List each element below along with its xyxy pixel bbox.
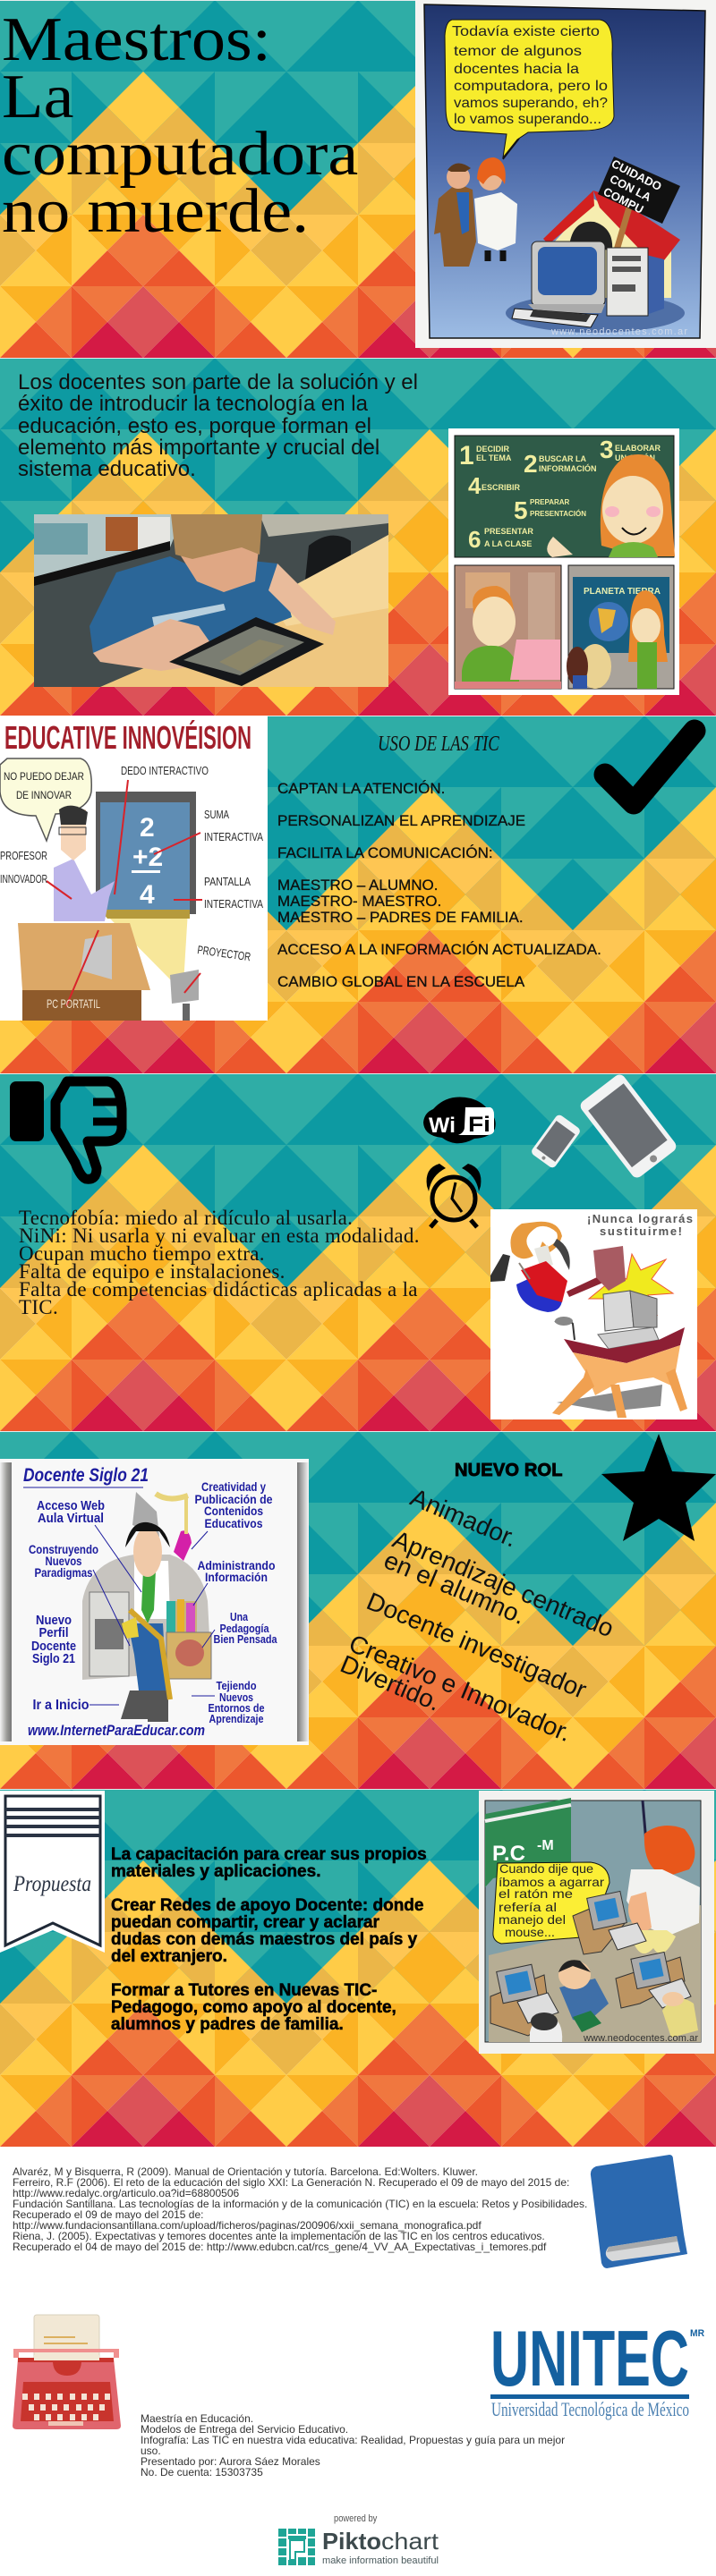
illustration: educative innoveision: +2 [132, 843, 163, 872]
text block: nuevo rol list: Aprendizaje centrado [389, 1525, 618, 1642]
text: datos de la maestria: uso. [141, 2445, 161, 2457]
logo: piktochart [278, 2528, 439, 2566]
illustration: cartoon manejo del mouse: mouse... [505, 1925, 555, 1939]
illustration: cartoon cuidado con la compu: www.neodocentes.com.ar [550, 326, 687, 337]
icon: typewriter [13, 2315, 121, 2429]
list: uso de las tic: FACILITA LA COMUNICACIÓN: [277, 844, 493, 861]
illustration: educative innoveision: INNOVADOR [0, 872, 47, 886]
illustration: docente siglo 21: Una [230, 1610, 249, 1623]
illustration: educative innoveision: 2 [140, 813, 155, 843]
references text: Ferreiro, R.F (2006). El reto de la educación del siglo XXI: La Generación N. Recuperado el 09 de mayo del 2015 de: [13, 2176, 569, 2189]
text block: nuevo rol list: Divertido. [337, 1650, 445, 1716]
illustration: educative innoveision: DEDO INTERACTIVO [121, 764, 209, 777]
text block: desventajas: Falta de equipo e instalaciones. [19, 1260, 286, 1283]
references text: Recuperado el 04 de mayo del 2015 de: http://www.edubcn.cat/rcs_gene/4_VV_AA_Expectativas_i_temores.pdf [13, 2241, 546, 2253]
icon: wifi [423, 1097, 496, 1143]
list: uso de las tic: PERSONALIZAN EL APRENDIZAJE [277, 812, 525, 829]
text block: desventajas: Ocupan mucho tiempo extra. [19, 1242, 265, 1265]
icon: check mark [594, 719, 705, 814]
illustration: docente siglo 21: Bien Pensada [213, 1632, 277, 1646]
illustration: pasos comic: PREPARAR [530, 498, 570, 506]
list: uso de las tic: ACCESO A LA INFORMACIÓN ACTUALIZADA. [277, 941, 601, 958]
logo: piktochart: Pikto [322, 2528, 381, 2555]
logo: piktochart: chart [381, 2528, 439, 2555]
photo: boy with tablet [34, 514, 388, 687]
icon: thumbs down [10, 1077, 127, 1184]
hammer [567, 1270, 616, 1297]
text: datos de la maestria: Modelos de Entrega del Servicio Educativo. [141, 2423, 348, 2436]
paragraph: los docentes: Los docentes son parte de la solución y el [18, 370, 418, 394]
illustration: cartoon manejo del mouse: www.neodocentes.com.ar [583, 2033, 698, 2044]
illustration: docente siglo 21: Paradigmas [34, 1565, 93, 1580]
illustration: nunca lograras sustituirme: sustituirme! [600, 1224, 682, 1238]
computer [646, 255, 664, 315]
text block: nuevo rol list: Animador. [406, 1483, 521, 1553]
illustration: pasos comic: 4 [468, 472, 482, 499]
text: datos de la maestria: Presentado por: Aurora Sáez Morales [141, 2455, 320, 2468]
illustration: docente siglo 21: Docente [31, 1639, 76, 1654]
man [434, 183, 476, 267]
illustration: docente siglo 21: www.InternetParaEducar.com [28, 1722, 205, 1739]
illustration: docente siglo 21: Construyendo [29, 1542, 98, 1556]
text block: nuevo rol list: Creativo e Innovador. [345, 1629, 575, 1747]
illustration: cartoon manejo del mouse: -M [537, 1838, 554, 1853]
dog house [553, 199, 671, 298]
title: La [2, 63, 73, 131]
illustration: cartoon manejo del mouse: manejo del [499, 1912, 566, 1927]
burst [589, 1254, 673, 1322]
illustration: pasos comic: 2 [524, 450, 538, 478]
text: datos de la maestria: No. De cuenta: 15303735 [141, 2466, 263, 2479]
logo: unitec: MR [690, 2328, 704, 2339]
text block: desventajas: NiNi: Ni usarla y ni evaluar en esta modalidad. [19, 1224, 420, 1247]
teacher [601, 454, 675, 556]
text block: propuesta: del extranjero. [111, 1947, 227, 1966]
illustration: docente siglo 21: Educativos [204, 1516, 263, 1530]
title: no muerde. [2, 177, 309, 246]
references text: http://www.redalyc.org/articulo.oa?id=68800506 [13, 2187, 239, 2199]
illustration: docente siglo 21: Contenidos [204, 1504, 263, 1518]
title: computadora [2, 120, 358, 189]
illustration: docente siglo 21: Creatividad y [201, 1479, 266, 1494]
paragraph: los docentes [18, 370, 418, 481]
illustration: cartoon manejo del mouse: el ratón me [499, 1886, 573, 1901]
icon: phones [532, 1075, 677, 1177]
references text [13, 2165, 587, 2253]
panel left [455, 565, 561, 689]
ribbon: propuesta [0, 1791, 105, 1953]
illustration: cartoon cuidado con la compu: Todavía existe cierto [452, 24, 600, 39]
text block: desventajas [19, 1207, 420, 1318]
text block: propuesta: Crear Redes de apoyo Docente: donde [111, 1896, 423, 1915]
list: uso de las tic: MAESTRO- MAESTRO. [277, 893, 441, 910]
paragraph: los docentes: sistema educativo. [18, 457, 196, 481]
illustration: docente siglo 21: Aprendizaje [209, 1712, 263, 1725]
text block: nuevo rol list: Docente investigador [362, 1588, 591, 1704]
illustration: pasos comic: UN GUIÓN [615, 453, 655, 462]
illustration: docente siglo 21: Información [205, 1570, 268, 1584]
references text: Recuperado el 09 de mayo del 2015 de: [13, 2208, 204, 2221]
illustration: pasos comic: 6 [468, 526, 481, 553]
computer [603, 1291, 634, 1331]
illustration: educative innoveision: SUMA [204, 808, 229, 821]
illustration: pasos comic: 1 [459, 441, 474, 470]
illustration: pasos comic: EL TEMA [476, 453, 512, 462]
illustration: educative innoveision [0, 716, 268, 1021]
references text: Alvaréz, M y Bisquerra, R (2009). Manual de Orientación y tutoría. Barcelona. Ed:Wolters. Kluwer. [13, 2165, 478, 2178]
illustration: cartoon cuidado con la compu: COMPU [601, 184, 646, 216]
illustration: docente siglo 21: Nuevo [36, 1613, 72, 1628]
illustration: cartoon manejo del mouse: íbamos a agarrar [499, 1875, 604, 1889]
illustration: educative innoveision: PROFESOR [0, 849, 47, 862]
text block: propuesta: Pedagogo, como apoyo al docente, [111, 1998, 396, 2017]
illustration: educative innoveision: PANTALLA [204, 875, 251, 888]
illustration: docente siglo 21: Acceso Web [37, 1498, 105, 1513]
icon: alarm clock [426, 1164, 482, 1229]
illustration: pasos comic: 3 [600, 436, 614, 463]
references text: http://www.fundacionsantillana.com/upload/ficheros/paginas/200906/xxii_semana_monografica.pdf [13, 2219, 482, 2232]
illustration: docente siglo 21: Publicación de [195, 1492, 273, 1506]
illustration: educative innoveision: PC PORTATIL [47, 996, 100, 1011]
text block: propuesta: La capacitación para crear sus propios [111, 1845, 427, 1864]
ribbon: propuesta: Propuesta [13, 1872, 91, 1896]
list: uso de las tic: CAMBIO GLOBAL EN LA ESCUELA [277, 973, 524, 990]
illustration: cartoon manejo del mouse: Cuando dije que [499, 1861, 593, 1876]
list: uso de las tic: MAESTRO – ALUMNO. [277, 877, 438, 894]
illustration: cartoon cuidado con la compu: lo vamos superando... [454, 112, 601, 127]
text: datos de la maestria: Maestría en Educación. [141, 2412, 253, 2425]
illustration: docente siglo 21: Nuevos [45, 1554, 82, 1568]
illustration: cartoon cuidado con la compu: docentes hacia la [454, 62, 579, 77]
illustration: docente siglo 21: Ir a Inicio [32, 1698, 90, 1713]
logo: piktochart: make information beautiful [322, 2555, 439, 2566]
list: uso de las tic: CAPTAN LA ATENCIÓN. [277, 780, 445, 797]
illustration: pasos comic: PRESENTAR [484, 527, 533, 536]
heading: nuevo rol: NUEVO ROL [455, 1461, 563, 1480]
illustration: pasos comic: ELABORAR [615, 444, 661, 453]
references text: Riena, J. (2005). Expectativas y temores docentes ante la implementación de las TIC en los centros educativos. [13, 2230, 545, 2242]
illustration: docente siglo 21: Tejiendo [217, 1679, 257, 1692]
illustration: cartoon cuidado con la compu: vamos superando, eh? [454, 96, 608, 111]
illustration: pasos comic: DECIDIR [476, 445, 510, 453]
illustration: docente siglo 21: Siglo 21 [32, 1651, 75, 1666]
text block: desventajas: Tecnofobía: miedo al ridículo al usarla. [19, 1207, 353, 1229]
paragraph: los docentes: educación, esto es, porque forman el [18, 414, 371, 438]
panel right [568, 565, 674, 689]
text block: desventajas: Falta de competencias didácticas aplicadas a la [19, 1278, 418, 1301]
illustration: cartoon manejo del mouse: refería al [499, 1900, 557, 1914]
icon: book [591, 2155, 687, 2268]
text block: propuesta: materiales y aplicaciones. [111, 1862, 320, 1881]
paragraph: los docentes: elemento más importante y crucial del [18, 436, 379, 460]
illustration: docente siglo 21: Pedagogía [220, 1622, 269, 1635]
desk [564, 1327, 685, 1363]
illustration: cartoon cuidado con la compu: CON LA [608, 172, 654, 204]
title: Maestros: [2, 5, 271, 74]
illustration: cartoon cuidado con la compu: temor de algunos [454, 44, 582, 59]
text: datos de la maestria: Infografía: Las TIC en nuestra vida educativa: Realidad, Propuestas y guía para un mejor [141, 2434, 565, 2446]
woman [474, 192, 517, 250]
powered by label: powered by [334, 2513, 377, 2524]
illustration: nunca lograras sustituirme [490, 1209, 697, 1419]
text: datos de la maestria [141, 2412, 565, 2479]
list: uso de las tic: MAESTRO – PADRES DE FAMILIA. [277, 909, 524, 926]
illustration: cartoon cuidado con la compu: CUIDADO [609, 157, 664, 193]
illustration: educative innoveision: NO PUEDO DEJAR [4, 770, 84, 783]
illustration: docente siglo 21: Administrando [197, 1558, 276, 1572]
illustration: docente siglo 21: Nuevos [219, 1690, 253, 1704]
illustration: docente siglo 21: Docente Siglo 21 [23, 1465, 149, 1486]
illustration: educative innoveision: 4 [140, 880, 155, 910]
illustration: nunca lograras sustituirme: ¡Nunca lograrás [587, 1212, 693, 1225]
teacher hanging [643, 1801, 646, 1843]
text block: propuesta: alumnos y padres de familia. [111, 2015, 344, 2034]
text block: nuevo rol list: en el alumno. [380, 1546, 530, 1630]
illustration: docente siglo 21 [0, 1459, 309, 1745]
icon: wifi: Wi [429, 1114, 456, 1138]
illustration: docente siglo 21: Entornos de [208, 1701, 265, 1715]
illustration: pasos comic: PRESENTACIÓN [530, 510, 586, 518]
illustration: cartoon manejo del mouse [479, 1791, 714, 2054]
illustration: cartoon cuidado con la compu [415, 0, 716, 348]
illustration: pasos comic: A LA CLASE [484, 539, 532, 548]
paragraph: los docentes: éxito de introducir la tecnología en la [18, 392, 368, 416]
text block: propuesta: puedan compartir, crear y aclarar [111, 1913, 379, 1932]
text block: propuesta [111, 1845, 427, 2034]
illustration: pasos comic: ESCRIBIR [482, 483, 521, 492]
illustration: educative innoveision: DE INNOVAR [16, 789, 72, 801]
central figure [559, 1979, 609, 2023]
illustration: pasos comic: BUSCAR LA [539, 454, 586, 463]
text block: propuesta: dudas con demás maestros del país y [111, 1930, 417, 1949]
illustration: pasos comic: INFORMACIÓN [539, 463, 596, 473]
title [2, 5, 358, 246]
illustration: pasos comic [448, 428, 679, 695]
text block: desventajas: TIC. [19, 1296, 58, 1318]
text block: nuevo rol list [337, 1483, 618, 1747]
references text: Fundación Santillana. Las tecnologías de la información y de la comunicación (TIC) en la escuela: Retos y Posibilidades. [13, 2198, 587, 2210]
text block: propuesta: Formar a Tutores en Nuevas TIC- [111, 1981, 377, 2000]
illustration: pasos comic: 5 [514, 496, 528, 524]
desks and computers [490, 1891, 691, 2036]
icon: wifi: Fi [468, 1113, 490, 1137]
illustration: cartoon cuidado con la compu: computadora, pero lo [454, 79, 608, 94]
illustration: cartoon manejo del mouse: P.C [492, 1842, 525, 1866]
heading: uso de las tic: USO DE LAS TIC [378, 733, 499, 756]
illustration: pasos comic: PLANETA TIERRA [584, 587, 661, 597]
icon: star [601, 1434, 716, 1541]
illustration: docente siglo 21: Perfil [39, 1625, 68, 1640]
list: uso de las tic [277, 780, 601, 990]
woman [510, 1222, 562, 1258]
illustration: docente siglo 21: Aula Virtual [38, 1511, 104, 1526]
